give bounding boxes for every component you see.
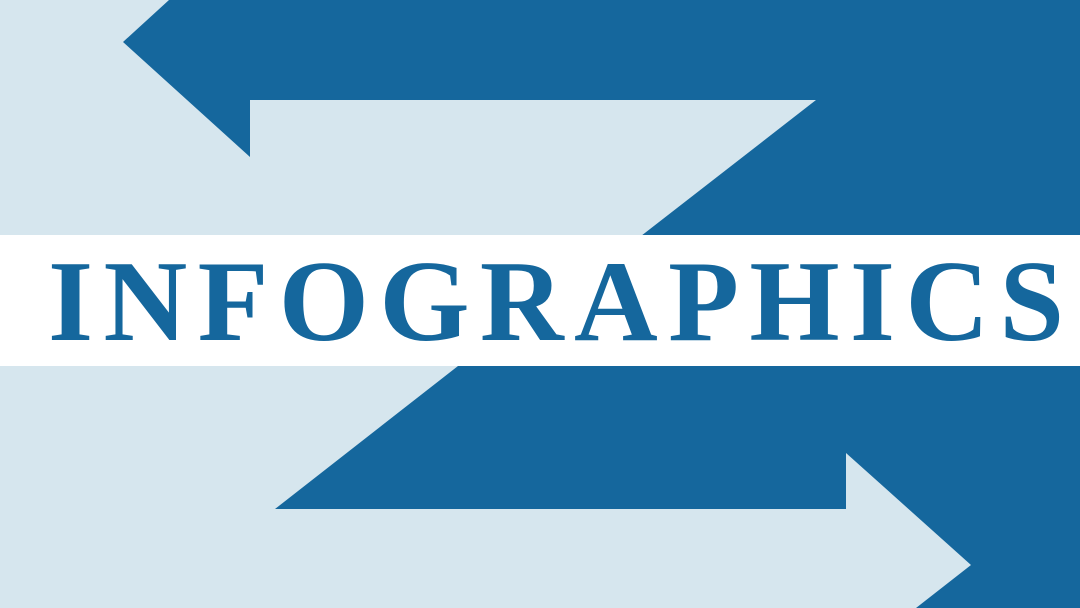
- title: INFOGRAPHICS: [48, 238, 1064, 366]
- arrow: top left-pointing: [123, 0, 1080, 236]
- arrow: bottom right-pointing: [275, 366, 1080, 608]
- title band: [0, 235, 1080, 366]
